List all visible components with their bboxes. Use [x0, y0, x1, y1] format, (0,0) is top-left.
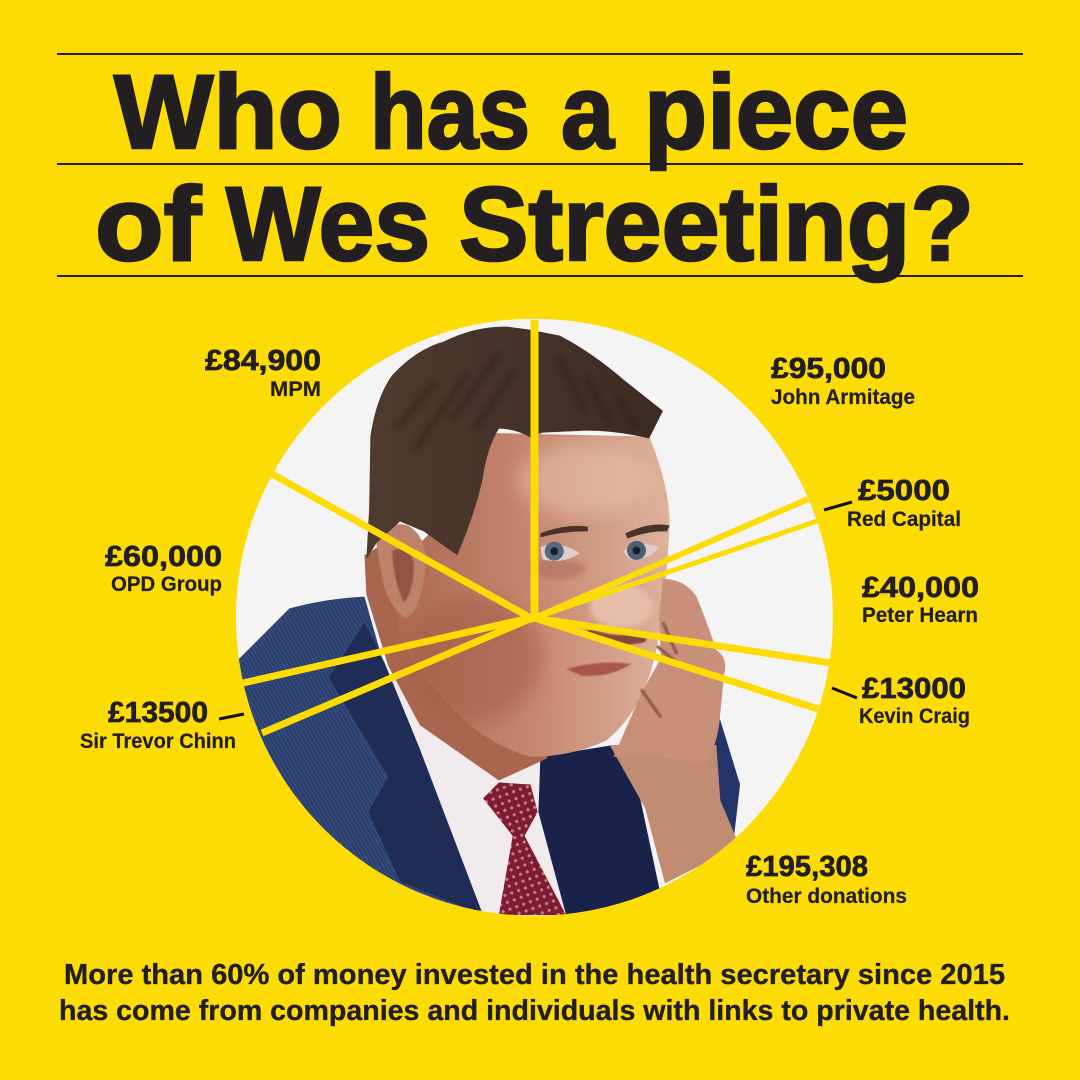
title with rules [57, 53, 1023, 283]
label: Other donations [746, 851, 907, 908]
portrait: face [396, 433, 670, 757]
label: Red Capital [824, 475, 961, 531]
portrait: nose [590, 585, 653, 628]
title with rules: a [561, 54, 615, 171]
footer statement: More than 60% of money invested in the health secretary since 2015 [64, 959, 1005, 991]
label: MPM: MPM [270, 378, 321, 401]
portrait: lapel shadow [329, 622, 483, 915]
portrait: tie [483, 783, 566, 915]
portrait: mouth [566, 663, 631, 676]
label: John Armitage: John Armitage [771, 386, 915, 409]
label: OPD Group: £60,000 [105, 541, 222, 573]
label: Sir Trevor Chinn [80, 697, 244, 753]
label: MPM: £84,900 [205, 345, 321, 377]
portrait: suit left [230, 597, 483, 915]
label: Peter Hearn [862, 572, 979, 627]
label: John Armitage [771, 353, 915, 409]
title with rules: Wes [226, 166, 430, 283]
label: Peter Hearn: Peter Hearn [862, 604, 978, 627]
portrait: irises [545, 542, 564, 561]
portrait: nose shadow [587, 630, 648, 646]
label: Kevin Craig [832, 673, 970, 728]
portrait: ear inner [392, 549, 414, 603]
portrait: neck [364, 548, 548, 780]
portrait: ear [376, 524, 426, 618]
portrait: eye sockets [538, 559, 586, 580]
pie chart with portrait photo [230, 310, 850, 930]
title with rules: has [370, 54, 530, 171]
label: Peter Hearn: £40,000 [862, 572, 979, 604]
portrait: cheek shading [408, 595, 542, 721]
label: Kevin Craig: £13000 [862, 673, 966, 705]
title with rules: Who [114, 54, 342, 171]
label: Sir Trevor Chinn: Sir Trevor Chinn [80, 730, 236, 753]
pie divider spokes [243, 320, 831, 733]
label: OPD Group [105, 541, 222, 596]
footer statement: has come from companies and individuals with links to private health. [59, 995, 1010, 1027]
portrait: eye whites [540, 544, 659, 561]
portrait: sleeve [714, 718, 740, 834]
label: MPM [205, 345, 321, 401]
title with rules: Streeting? [459, 166, 974, 283]
label: OPD Group: OPD Group [111, 573, 222, 596]
title with rules: piece [644, 54, 908, 171]
portrait: forearm [610, 745, 736, 883]
label: Other donations: £195,308 [746, 851, 868, 883]
footer statement [59, 959, 1010, 1027]
portrait: hair [364, 327, 663, 595]
label: Other donations: Other donations [746, 885, 907, 908]
portrait: hand [614, 579, 725, 765]
label: Kevin Craig: Kevin Craig [859, 705, 970, 728]
portrait: forehead highlight [519, 444, 653, 516]
label: John Armitage: £95,000 [771, 353, 886, 385]
portrait: shirt [384, 662, 566, 915]
portrait: brows [540, 525, 670, 539]
portrait: jacket right [538, 745, 665, 915]
portrait: finger creases [641, 622, 681, 717]
title with rules: of [95, 166, 202, 283]
portrait: hair texture [396, 354, 562, 448]
label: Red Capital: £5000 [858, 475, 950, 507]
portrait: pupils [550, 547, 558, 555]
label: Sir Trevor Chinn: £13500 [108, 697, 208, 729]
label: Red Capital: Red Capital [847, 508, 961, 531]
